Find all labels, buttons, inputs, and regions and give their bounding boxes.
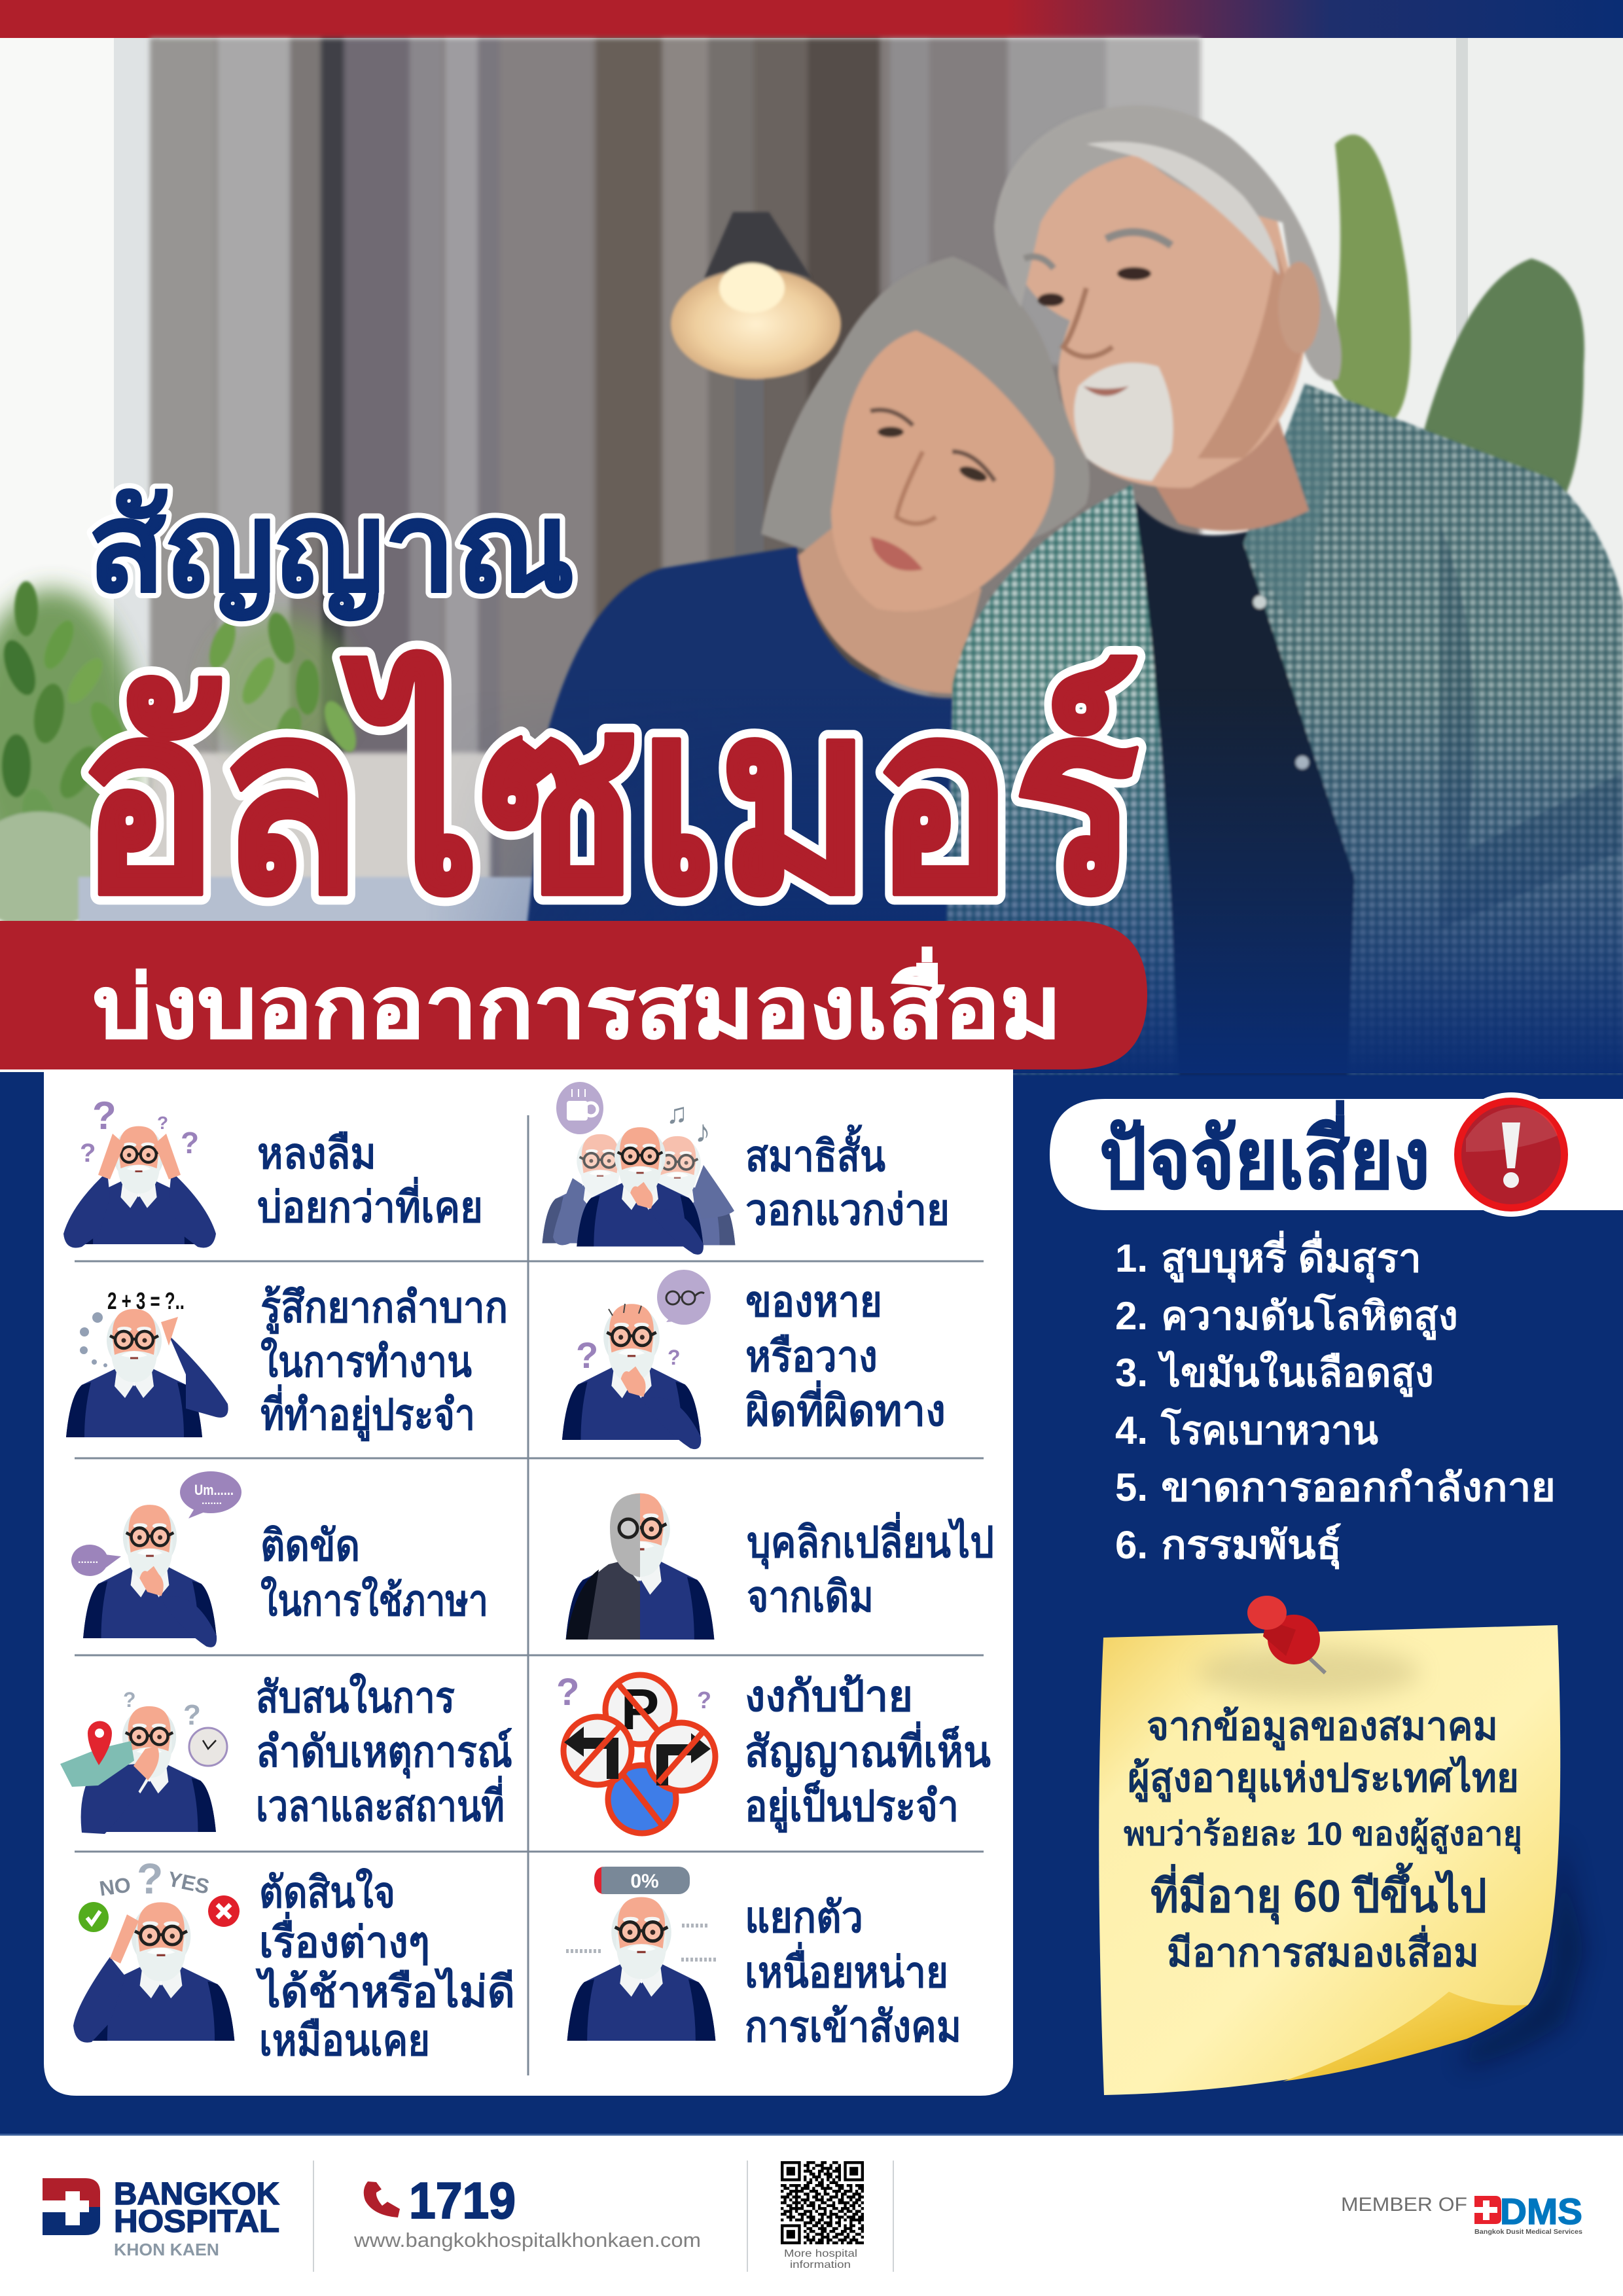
photo: elderly couple: [0, 38, 1623, 1073]
logo: Bangkok Hospital: [43, 2177, 279, 2259]
title: สัญญาณ: สัญญาณ: [88, 478, 575, 620]
QR caption: information: [790, 2259, 851, 2270]
banner: subtitle: [0, 921, 1147, 1069]
icon: man with map and clock: ?: [183, 1699, 201, 1731]
risk list: ไขมันในเลือดสูง: [1157, 1350, 1434, 1397]
photo: lamp: [671, 212, 841, 569]
QR caption: [784, 2248, 857, 2270]
risk list: สูบบุหรี่ ดื่มสุรา: [1161, 1230, 1421, 1283]
icon: man holding head: [63, 1094, 216, 1247]
icon: phone: [364, 2181, 400, 2217]
logo: member of BDMS: [1341, 2191, 1582, 2236]
text: หรือวาง: [745, 1332, 878, 1380]
logo: member of BDMS: Bangkok Dusit Medical Services: [1474, 2229, 1582, 2236]
website: www.bangkokhospitalkhonkaen.com: [353, 2229, 701, 2251]
text: รู้สึกยากลำบาก: [260, 1283, 508, 1335]
footer: [0, 2134, 1623, 2296]
panel: warning signs: [44, 1069, 1013, 2096]
icon: man doing sums: [66, 1287, 228, 1437]
item: language: [71, 1471, 488, 1647]
note text: พบว่าร้อยละ 10 ของผู้สูงอายุ: [1124, 1816, 1522, 1854]
logo: Bangkok Hospital: HOSPITAL: [114, 2204, 279, 2239]
icon: man holding head: ?: [157, 1113, 168, 1133]
text: ได้ช้าหรือไม่ดี: [255, 1967, 515, 2016]
text: [747, 1511, 994, 1621]
text: ตัดสินใจ: [259, 1867, 395, 1916]
note text: [1124, 1704, 1522, 1975]
logo: member of BDMS: MEMBER OF: [1341, 2194, 1467, 2215]
phone number: [364, 2172, 516, 2229]
phone number: 1719: [409, 2172, 516, 2229]
icon: traffic signs: [556, 1671, 715, 1833]
text: อยู่เป็นประจำ: [745, 1780, 959, 1833]
text: ที่ทำอยู่ประจำ: [260, 1384, 475, 1442]
sticky note: [1099, 1596, 1584, 2095]
text: บุคลิกเปลี่ยนไป: [747, 1511, 994, 1570]
icon: man with speech bubbles: [71, 1471, 241, 1647]
item: difficulty at work: [66, 1283, 508, 1442]
text: [256, 1672, 512, 1830]
risk list: 4.: [1115, 1408, 1148, 1452]
icon: half-grey man: [566, 1494, 714, 1640]
icon: three faces with coffee and music: [543, 1082, 735, 1255]
icon: man holding head: ?: [181, 1126, 199, 1160]
icon: alert: [1449, 1092, 1573, 1217]
item: personality change: [566, 1494, 994, 1640]
logo: Bangkok Hospital: KHON KAEN: [114, 2240, 219, 2259]
icon: man with empty battery: [566, 1867, 717, 2041]
icon: man deciding yes or no: YES: [166, 1867, 211, 1899]
subtitle text: บ่งบอกอาการสมองเสื่อม: [93, 946, 1061, 1056]
panel: risk factors: [1050, 1092, 1623, 1570]
icon: man deciding yes or no: NO: [98, 1873, 132, 1901]
risk list: 5.: [1115, 1465, 1148, 1509]
icon: three faces with coffee and music: ♫: [666, 1098, 688, 1130]
photo: plants: [0, 135, 1584, 929]
note text: มีอาการสมองเสื่อม: [1167, 1925, 1479, 1975]
logo: member of BDMS: DMS: [1500, 2191, 1582, 2232]
risk list: โรคเบาหวาน: [1160, 1407, 1378, 1452]
title: อัลไซเมอร์: อัลไซเมอร์: [78, 649, 1139, 946]
text: [745, 1124, 950, 1234]
icon: man holding head: ?: [92, 1094, 116, 1138]
background: navy page: [0, 1068, 1623, 2135]
text: วอกแวกง่าย: [745, 1185, 950, 1234]
text: เวลาและสถานที่: [256, 1775, 505, 1830]
text: [745, 1277, 946, 1435]
text: ในการทำงาน: [260, 1336, 472, 1386]
icon: man with speech bubbles: .......: [78, 1554, 98, 1566]
photo: navy fade: [452, 709, 1623, 1073]
icon: man deciding yes or no: ?: [137, 1854, 163, 1903]
icon: man holding head: ?: [80, 1139, 96, 1168]
text: เรื่องต่างๆ: [259, 1911, 430, 1966]
photo background: room with curtain: [0, 38, 1623, 1072]
logo: Bangkok Hospital: BANGKOK: [114, 2177, 279, 2212]
icon: man looking for glasses: ?: [668, 1346, 681, 1369]
text: [260, 1521, 488, 1624]
icon: traffic signs: ?: [697, 1687, 711, 1713]
QR code: [781, 2162, 864, 2270]
text: [745, 1672, 991, 1833]
photo: woman: [510, 257, 1090, 1073]
risk list: 1.: [1115, 1236, 1148, 1280]
icon: man looking for glasses: ?: [576, 1335, 598, 1376]
text: [260, 1283, 508, 1442]
icon: push pin: [1247, 1596, 1325, 1673]
text: บ่อยกว่าที่เคย: [257, 1176, 483, 1231]
text: ลำดับเหตุการณ์: [256, 1727, 512, 1779]
risk list: 3.: [1115, 1351, 1148, 1395]
top bar: [0, 0, 1623, 38]
heading: ปัจจัยเสี่ยง: [1099, 1100, 1430, 1206]
risk list: กรรมพันธุ์: [1161, 1523, 1342, 1570]
icon: traffic signs: ?: [556, 1671, 579, 1713]
item: confused time and place: [60, 1672, 512, 1834]
item: short attention: [543, 1082, 950, 1255]
text: เหมือนเคย: [259, 2016, 430, 2064]
risk list: 2.: [1115, 1294, 1148, 1338]
item: losing things: [562, 1270, 946, 1449]
icon: man with empty battery: 0%: [630, 1871, 659, 1892]
QR caption: More hospital: [784, 2248, 857, 2259]
title: สัญญาณ: สัญญาณ: [88, 478, 575, 620]
icon: man doing sums: 2 + 3 = ?..: [107, 1287, 185, 1314]
item: decisions: [73, 1854, 515, 2064]
icon: man looking for glasses: [562, 1270, 711, 1449]
text: ในการใช้ภาษา: [260, 1575, 488, 1624]
icon: man with map and clock: [60, 1688, 227, 1834]
risk list: 6.: [1115, 1523, 1148, 1567]
item: road signs: [556, 1671, 991, 1833]
icon: three faces with coffee and music: ♪: [695, 1115, 711, 1149]
note text: ที่มีอายุ 60 ปีขึ้นไป: [1150, 1862, 1487, 1925]
text: สับสนในการ: [256, 1672, 455, 1721]
text: สมาธิสั้น: [745, 1124, 885, 1180]
photo: man: [942, 105, 1623, 1073]
risk list: [1115, 1230, 1556, 1570]
icon: man with speech bubbles: .......: [202, 1496, 222, 1507]
icon: traffic signs: P: [621, 1677, 659, 1742]
text: [255, 1867, 515, 2064]
risk list: ความดันโลหิตสูง: [1161, 1293, 1458, 1340]
text: แยกตัว: [745, 1893, 863, 1941]
item: forgetful: [63, 1094, 483, 1247]
icon: man with map and clock: ?: [123, 1688, 136, 1712]
text: หลงลืม: [257, 1129, 376, 1177]
title: อัลไซเมอร์: อัลไซเมอร์: [78, 649, 1139, 946]
text: จากเดิม: [747, 1572, 874, 1621]
icon: man with speech bubbles: Um......: [194, 1482, 234, 1498]
note text: ผู้สูงอายุแห่งประเทศไทย: [1128, 1755, 1519, 1803]
risk list: ขาดการออกกำลังกาย: [1161, 1465, 1556, 1509]
text: การเข้าสังคม: [745, 2002, 961, 2051]
text: [257, 1129, 483, 1231]
text: ผิดที่ผิดทาง: [745, 1380, 946, 1435]
icon: man deciding yes or no: [73, 1854, 240, 2043]
text: ของหาย: [745, 1277, 882, 1325]
item: social withdrawal: [566, 1867, 961, 2051]
heading pill: [1050, 1099, 1623, 1210]
text: สัญญาณที่เห็น: [745, 1721, 991, 1777]
text: เหนื่อยหน่าย: [745, 1941, 948, 1996]
text: งงกับป้าย: [745, 1672, 913, 1720]
text: [745, 1893, 961, 2051]
text: ติดขัด: [260, 1521, 360, 1570]
note text: จากข้อมูลของสมาคม: [1147, 1704, 1498, 1751]
